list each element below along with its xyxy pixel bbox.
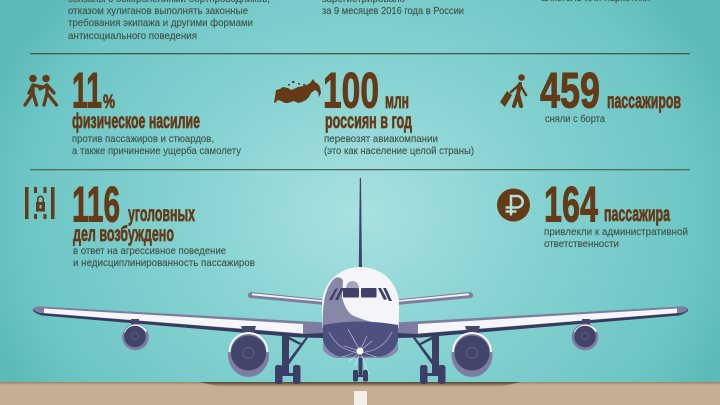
icon: fighting people (25, 75, 56, 105)
large engines (228, 326, 492, 377)
stat: 116 criminal cases: и недисциплинированность пассажиров (73, 258, 255, 269)
stat: 116 criminal cases: 116 (72, 176, 120, 232)
icon: ruble coin (497, 188, 530, 222)
stat: 164 passengers: пассажира (604, 202, 671, 226)
top left text block: антисоциального поведения (68, 31, 197, 42)
stat: 116 criminal cases (72, 176, 255, 269)
grey shading (323, 277, 396, 330)
icon: passenger with suitcase (500, 74, 526, 107)
stat: 11 percent: против пассажиров и стюардов, (72, 134, 214, 145)
top left text block: требования экипажа и другими формами (68, 17, 253, 29)
stat: 11 percent (72, 62, 242, 157)
dark underbelly (323, 322, 398, 356)
stat: 100 million: млн (385, 89, 409, 113)
stat: 100 million (323, 62, 474, 157)
stat: 100 million: перевозят авиакомпании (324, 134, 438, 145)
stat: 116 criminal cases: в ответ на агрессивное поведение (73, 246, 226, 257)
stat: 100 million: россиян в год (325, 109, 412, 133)
stat: 164 passengers: привлекли к административной (544, 227, 688, 238)
landing light (342, 329, 376, 374)
icon: map of Russia (274, 79, 321, 103)
top center text block (322, 0, 464, 17)
stat: 11 percent: % (103, 92, 115, 113)
small engines (122, 319, 598, 350)
top left text block (68, 0, 270, 42)
airplane (33, 178, 688, 384)
nose gear (353, 350, 368, 382)
stat: 100 million: (это как население целой страны) (324, 146, 474, 157)
top left text block: отказом хулиганов выполнять законные (68, 6, 248, 17)
horizontal stabilizers (248, 292, 473, 305)
stat: 11 percent: физическое насилие (72, 109, 200, 133)
fuselage nose (322, 267, 399, 358)
stat: 164 passengers: ответственности (544, 239, 619, 250)
left wing (33, 306, 325, 338)
stat: 116 criminal cases: дел возбуждено (73, 222, 174, 246)
tail fin (359, 178, 362, 270)
stat: 11 percent: а также причинение ущерба самолету (72, 145, 242, 157)
stat: 459 passengers: сняли с борта (545, 113, 605, 125)
dome and windows (346, 281, 359, 288)
right wing (396, 306, 688, 338)
top center text block: за 9 месяцев 2016 года в России (322, 6, 464, 17)
stat: 100 million: 100 (323, 62, 379, 118)
stat: 11 percent: 11 (72, 62, 102, 118)
stat: 164 passengers (544, 176, 688, 250)
icon: prison bars with lock (25, 187, 54, 219)
stat: 459 passengers (540, 62, 681, 125)
stat: 459 passengers: 459 (540, 62, 600, 118)
ground runway (0, 382, 720, 405)
stat: 116 criminal cases: уголовных (128, 202, 195, 226)
stat: 164 passengers: 164 (544, 176, 598, 232)
main landing gear (275, 335, 446, 384)
